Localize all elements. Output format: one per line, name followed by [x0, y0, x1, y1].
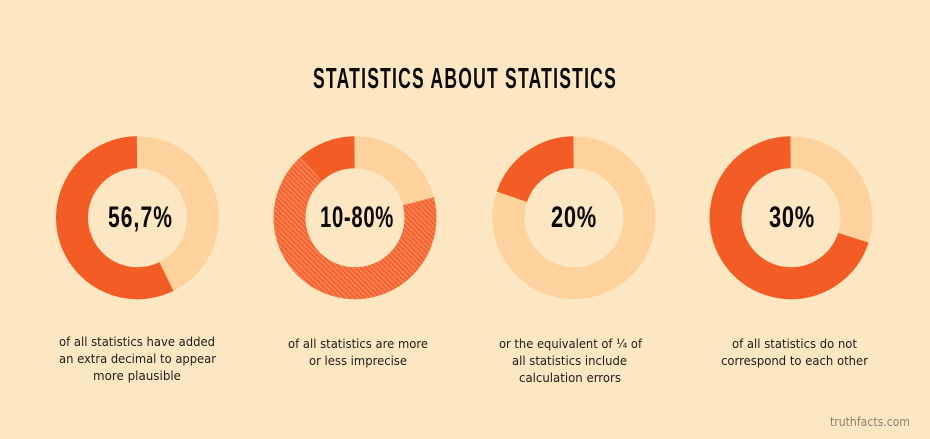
donut chart: 56,7%: [72, 152, 203, 283]
panel: 20% statistic: [499, 152, 643, 385]
source credit: truthfacts.com: [830, 415, 910, 429]
caption: calculation errors: or the equivalent of ¼ of: [499, 337, 643, 351]
caption: decimal: of all statistics have added: [59, 335, 215, 349]
caption: imprecise: or less imprecise: [309, 354, 407, 368]
panel: 56,7% statistic: [59, 152, 216, 383]
donut chart: 30%: [726, 152, 856, 283]
caption: calculation errors: calculation errors: [519, 371, 621, 385]
value: 56,7%: 56,7%: [108, 201, 173, 234]
title: STATISTICS ABOUT STATISTICS: [313, 63, 617, 95]
caption: calculation errors: [499, 337, 643, 385]
caption: do not correspond: [721, 337, 868, 368]
caption: do not correspond: of all statistics do not: [732, 337, 857, 351]
donut chart: 20%: [508, 152, 640, 283]
caption: do not correspond: correspond to each other: [721, 354, 868, 368]
donut chart: 10-80%: [290, 152, 420, 283]
caption: imprecise: [288, 337, 428, 368]
value: 20%: 20%: [551, 201, 597, 234]
panel: 30% statistic: [721, 152, 868, 368]
caption: decimal: [59, 335, 216, 383]
panel: 10-80% statistic: [288, 152, 428, 368]
caption: decimal: an extra decimal to appear: [59, 352, 216, 366]
caption: imprecise: of all statistics are more: [288, 337, 428, 351]
caption: calculation errors: all statistics include: [512, 354, 627, 368]
value: 10-80%: 10-80%: [320, 201, 394, 234]
value: 30%: 30%: [769, 201, 815, 234]
caption: decimal: more plausible: [93, 369, 181, 383]
